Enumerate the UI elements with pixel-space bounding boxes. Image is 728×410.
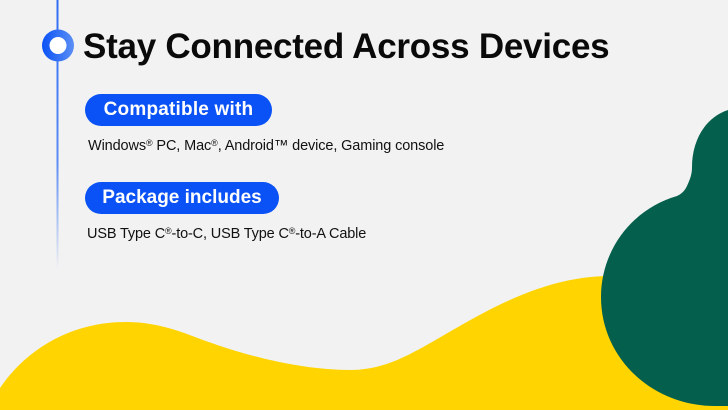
timeline marker — [42, 30, 74, 62]
title: Stay Connected Across Devices — [83, 27, 609, 66]
timeline line — [56, 0, 58, 264]
package contents text: USB Type C®-to-C, USB Type C®-to-A Cable — [87, 226, 366, 242]
compatible devices text: Windows® PC, Mac®, Android™ device, Gaming console — [88, 138, 444, 154]
pill: package includes — [85, 182, 279, 214]
yellow wave — [0, 276, 728, 410]
pill: compatible with — [85, 94, 272, 126]
pill: package includes: Package includes — [102, 187, 262, 208]
green blob — [601, 110, 728, 406]
pill: compatible with: Compatible with — [104, 99, 253, 120]
